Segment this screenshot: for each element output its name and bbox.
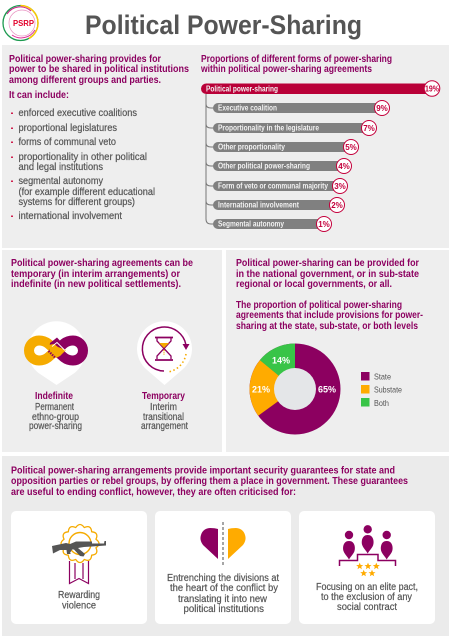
panel heading: temporary (in interim arrangements) or — [11, 269, 180, 280]
card text: to the exclusion of any — [321, 592, 412, 603]
intro text: It can include: — [9, 90, 69, 101]
card text: social contract — [337, 602, 397, 613]
bar chart: forms of power-sharing: Segmental autonomy — [218, 220, 285, 229]
bar chart: forms of power-sharing: Form of veto or communal majority — [218, 182, 329, 191]
list of forms: proportionality in other political — [18, 152, 147, 163]
bar chart: forms of power-sharing: Political power-sharing — [206, 84, 278, 94]
label: indefinite — [29, 391, 82, 432]
list of forms: proportional legislatures — [18, 123, 117, 134]
legend — [361, 372, 402, 408]
label: temporary — [141, 391, 188, 432]
card text: political institutions — [184, 604, 264, 615]
label: indefinite: Permanent — [35, 402, 74, 413]
intro text: Political power-sharing provides for — [9, 54, 161, 65]
icon: people on podium with stars — [340, 525, 396, 576]
logo: PSRP — [3, 6, 38, 40]
bar chart: forms of power-sharing: Proportionality in the legislature — [218, 124, 320, 133]
list of forms: enforced executive coalitions — [18, 108, 137, 119]
bar chart: forms of power-sharing: International involvement — [218, 201, 299, 210]
label: indefinite: ethno-group — [32, 412, 79, 423]
label: temporary: arrangement — [141, 421, 188, 432]
icon: infinity handshake pin — [27, 321, 86, 385]
icon: rosette with rifle — [52, 525, 106, 584]
bar chart: forms of power-sharing — [201, 81, 440, 232]
bar chart: forms of power-sharing: 19% — [425, 84, 439, 93]
donut chart — [250, 343, 340, 434]
list of forms: systems for different groups) — [18, 197, 135, 208]
panel heading: Political power-sharing arrangements provide important security guarantees for state and — [11, 466, 395, 476]
panel heading: indefinite (in new political settlements). — [11, 279, 181, 290]
chart title: Proportions of different forms of power-sharing — [201, 54, 392, 65]
icon: hourglass pin — [137, 321, 192, 385]
panel heading: sharing at the state, sub-state, or both levels — [236, 321, 418, 332]
card text — [167, 573, 279, 615]
chart title: within political power-sharing agreements — [200, 64, 372, 75]
panel heading: regional or local governments, or all. — [236, 279, 392, 290]
panel heading: are useful to ending conflict, however, they are often criticised for: — [11, 487, 296, 498]
intro text: among different groups and parties. — [9, 75, 161, 86]
legend: Both — [374, 398, 389, 408]
list of forms: and legal institutions — [18, 162, 103, 173]
chart title — [200, 54, 392, 75]
label: indefinite: power-sharing — [29, 421, 82, 432]
bar chart: forms of power-sharing: Other political power-sharing — [218, 162, 310, 171]
panel heading — [11, 258, 193, 290]
panel heading: in the national government, or in sub-state — [236, 269, 419, 280]
intro text: power to be shared in political institutions — [9, 64, 189, 75]
list of forms: forms of communal veto — [18, 137, 117, 148]
panel heading: Political power-sharing agreements can be — [11, 258, 193, 269]
panel heading: Political power-sharing can be provided for — [236, 258, 419, 269]
card text: Rewarding — [58, 590, 100, 601]
bar chart: forms of power-sharing: 9% — [376, 104, 388, 113]
panel heading — [236, 258, 423, 332]
bar chart: forms of power-sharing: 4% — [338, 162, 350, 171]
legend: Substate — [374, 384, 402, 394]
panel: temporary or indefinite — [2, 250, 222, 452]
card text: Entrenching the divisions at — [167, 573, 279, 584]
bar chart: forms of power-sharing: Executive coalition — [218, 104, 277, 113]
donut chart: 14% — [272, 356, 290, 366]
intro text — [9, 54, 189, 101]
card text: violence — [62, 600, 97, 612]
list of forms: (for example different educational — [18, 187, 155, 198]
list of forms: segmental autonomy — [18, 176, 103, 187]
donut chart: 21% — [252, 384, 270, 394]
logo: PSRP: PSRP — [13, 19, 34, 28]
bar chart: forms of power-sharing: 2% — [331, 201, 343, 210]
bar chart: forms of power-sharing: 1% — [318, 220, 330, 229]
list of forms — [11, 108, 155, 222]
panel heading — [11, 466, 408, 498]
panel: security guarantees and criticisms — [2, 456, 449, 636]
list of forms: international involvement — [18, 211, 122, 222]
card: rewarding violence — [11, 511, 147, 624]
label: indefinite: Indefinite — [35, 391, 73, 402]
panel heading: The proportion of political power-sharing — [236, 300, 402, 311]
card: elite pact — [299, 511, 435, 624]
bar chart: forms of power-sharing: 3% — [334, 182, 346, 191]
card text — [58, 590, 100, 612]
title: Political Power-Sharing — [85, 10, 362, 40]
label: temporary: Interim — [150, 402, 177, 413]
card text: translating it into new — [178, 594, 268, 605]
card text — [316, 582, 418, 613]
card: entrenching divisions — [155, 511, 291, 624]
bar chart: forms of power-sharing: Other proportionality — [218, 143, 286, 152]
label: temporary: Temporary — [142, 391, 185, 402]
panel: levels of government — [226, 250, 449, 452]
bar chart: forms of power-sharing: 5% — [345, 143, 357, 152]
donut chart: 65% — [318, 384, 336, 394]
card text: Focusing on an elite pact, — [316, 582, 418, 593]
legend: State — [374, 372, 391, 382]
bar chart: forms of power-sharing: 7% — [363, 124, 375, 133]
panel: what power-sharing is — [2, 45, 449, 248]
label: temporary: transitional — [143, 412, 184, 423]
card text: the heart of the conflict by — [170, 583, 278, 594]
icon: split heart — [200, 522, 246, 567]
